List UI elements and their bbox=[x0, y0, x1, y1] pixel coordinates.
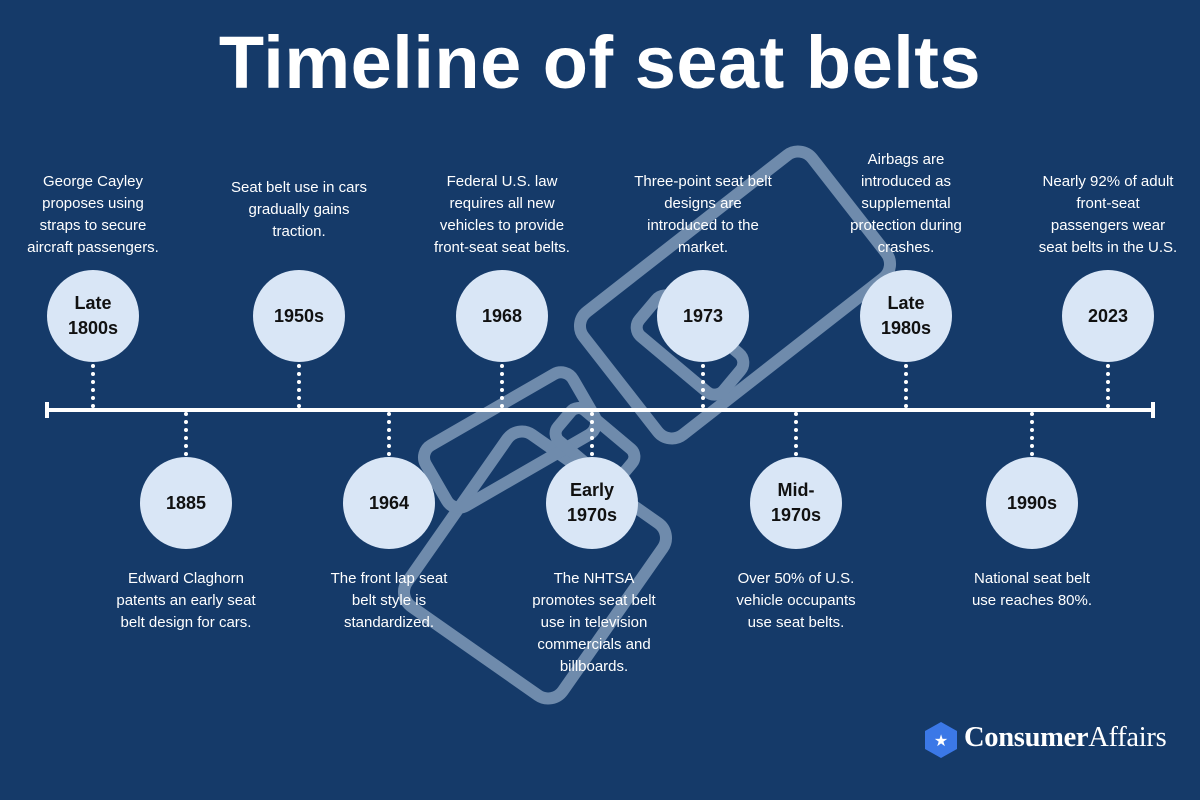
event: Early 1970s bbox=[532, 412, 656, 675]
text: commercials and bbox=[537, 636, 651, 653]
text: aircraft passengers. bbox=[27, 239, 159, 256]
text: proposes using bbox=[42, 195, 144, 212]
title: Timeline of seat belts bbox=[219, 21, 981, 104]
text: standardized. bbox=[344, 614, 434, 631]
text: promotes seat belt bbox=[532, 592, 656, 609]
text: The NHTSA bbox=[554, 570, 634, 587]
text: Mid- bbox=[778, 480, 814, 500]
event: 1964 bbox=[330, 412, 448, 631]
text: 1980s bbox=[881, 318, 931, 338]
icon: hexagon star: ★ bbox=[934, 731, 948, 750]
text: 1885 bbox=[166, 492, 206, 512]
text: Nearly 92% of adult bbox=[1043, 173, 1173, 190]
text: 1964 bbox=[369, 492, 409, 512]
text: front-seat bbox=[1076, 195, 1140, 212]
text: traction. bbox=[272, 223, 326, 240]
text: 1968 bbox=[482, 306, 522, 326]
text: Airbags are bbox=[868, 151, 944, 168]
text: National seat belt bbox=[974, 570, 1090, 587]
text: straps to secure bbox=[40, 217, 146, 234]
text: crashes. bbox=[878, 239, 934, 256]
text: designs are bbox=[664, 195, 742, 212]
text: vehicles to provide bbox=[440, 217, 564, 234]
text: front-seat seat belts. bbox=[434, 239, 570, 256]
text: introduced to the bbox=[647, 217, 759, 234]
text: George Cayley bbox=[43, 173, 143, 190]
text: Over 50% of U.S. bbox=[738, 570, 854, 587]
event: Mid-1970s bbox=[736, 412, 856, 631]
text: Late bbox=[74, 293, 112, 313]
text: billboards. bbox=[560, 658, 628, 675]
text: supplemental bbox=[861, 195, 951, 212]
text: Federal U.S. law bbox=[447, 173, 557, 190]
text: Early bbox=[570, 480, 614, 500]
text: seat belts in the U.S. bbox=[1039, 239, 1177, 256]
event: 1973 bbox=[634, 173, 772, 408]
text: Edward Claghorn bbox=[128, 570, 244, 587]
event: Late 1980s bbox=[850, 151, 962, 408]
event: 2023 bbox=[1039, 173, 1177, 408]
text: The front lap seat bbox=[331, 570, 447, 587]
text: passengers wear bbox=[1051, 217, 1165, 234]
text: use reaches 80%. bbox=[972, 592, 1092, 609]
icon: hexagon star bbox=[925, 722, 957, 758]
logo: ConsumerAffairs: ConsumerAffairs bbox=[964, 722, 1166, 753]
text: 1973 bbox=[683, 306, 723, 326]
text: patents an early seat bbox=[116, 592, 256, 609]
event: 1950s bbox=[231, 179, 367, 408]
event: 1990s bbox=[972, 412, 1092, 609]
text: Three-point seat belt bbox=[634, 173, 772, 190]
text: belt style is bbox=[352, 592, 426, 609]
text: Late bbox=[887, 293, 924, 313]
text: 1950s bbox=[274, 306, 324, 326]
event: 1885 bbox=[116, 412, 256, 631]
text: 1970s bbox=[567, 505, 617, 525]
text: requires all new bbox=[449, 195, 555, 212]
text: protection during bbox=[850, 217, 962, 234]
text: Seat belt use in cars bbox=[231, 179, 367, 196]
text: use in television bbox=[541, 614, 647, 631]
text: introduced as bbox=[861, 173, 951, 190]
text: market. bbox=[678, 239, 728, 256]
text: vehicle occupants bbox=[736, 592, 856, 609]
text: belt design for cars. bbox=[121, 614, 251, 631]
text: 1800s bbox=[68, 318, 118, 338]
text: 1990s bbox=[1007, 492, 1057, 512]
text: gradually gains bbox=[249, 201, 349, 218]
text: use seat belts. bbox=[748, 614, 844, 631]
event: Late 1800s bbox=[27, 173, 159, 408]
text: 1970s bbox=[771, 505, 821, 525]
text: 2023 bbox=[1088, 306, 1128, 326]
timeline axis bbox=[47, 408, 1153, 412]
event: 1968 bbox=[434, 173, 570, 408]
